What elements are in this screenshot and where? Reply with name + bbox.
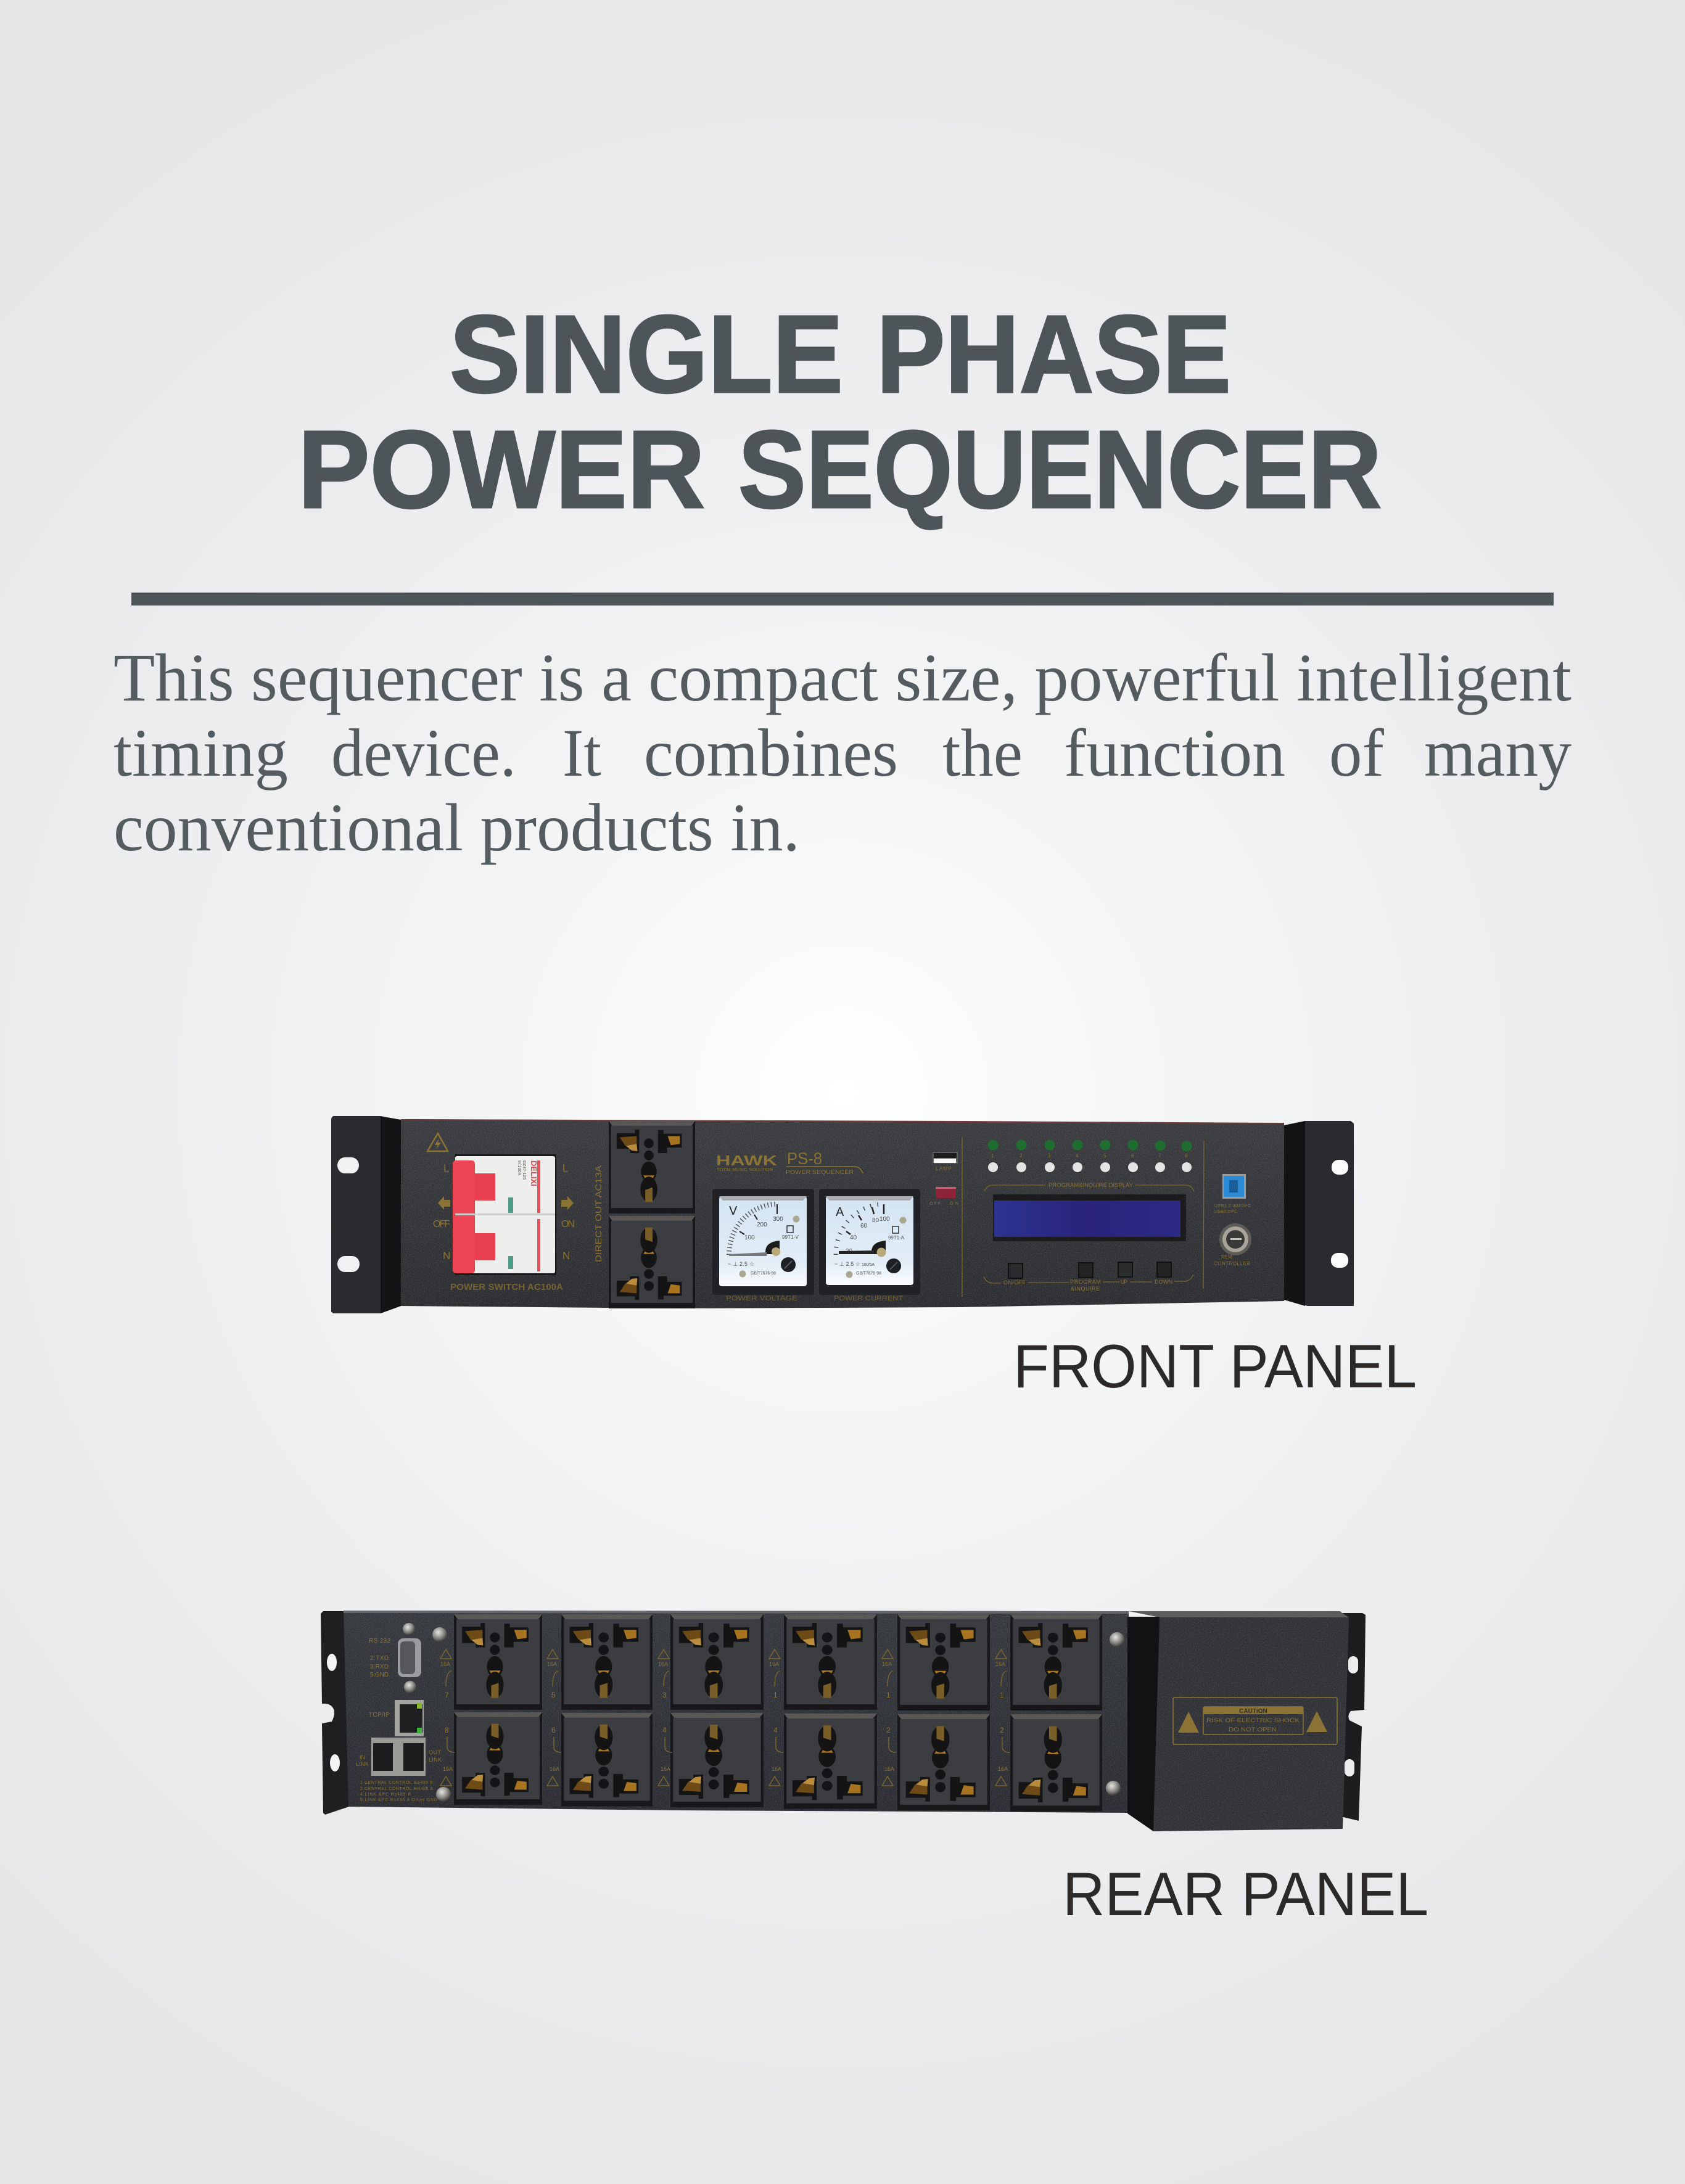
- rear socket 8: [561, 1713, 653, 1806]
- remote controller connector: REM: [1221, 1254, 1232, 1260]
- brand logo HAWK PS-8: PS-8: [787, 1149, 822, 1168]
- wiring notes: 2.CENTRAL CONTROL RS485 A: [360, 1787, 433, 1791]
- heading rule: [131, 593, 1554, 606]
- breaker labels: OFF: [433, 1219, 450, 1230]
- channel LEDs: 2: [1020, 1153, 1023, 1159]
- caution label: [1173, 1698, 1337, 1744]
- rear sockets top row: [454, 1614, 1102, 1710]
- rear right rack ear: [1326, 1613, 1366, 1821]
- circuit breaker: In:100A: [517, 1160, 521, 1175]
- channel LEDs: 5: [1103, 1153, 1106, 1159]
- socket strip labels: 8: [445, 1726, 449, 1734]
- button labels: [984, 1275, 1193, 1292]
- breaker labels: L: [443, 1162, 449, 1174]
- description paragraph: timing: [113, 715, 288, 790]
- ammeter: 20: [846, 1248, 853, 1255]
- socket strip labels: 1: [886, 1691, 891, 1699]
- wiring notes: 4.LINK &PC Rs485 B: [360, 1792, 411, 1797]
- ammeter: ~ ⊥ 2.5 ☆: [834, 1261, 860, 1267]
- socket strip labels: 16A: [882, 1661, 892, 1667]
- rear chassis body: [344, 1611, 1129, 1813]
- breaker labels: POWER SWITCH AC100A: [450, 1282, 563, 1292]
- wiring notes: 5.LINK &PC Rs485 A Other GND: [360, 1798, 437, 1802]
- socket strip labels: 16A: [550, 1766, 559, 1772]
- remote controller connector: [1214, 1223, 1251, 1266]
- socket strip labels: 16A: [547, 1661, 557, 1667]
- socket strip labels: 4: [773, 1726, 778, 1734]
- socket strip labels: 2: [1000, 1726, 1004, 1734]
- rear socket 7: [454, 1712, 542, 1805]
- socket strip labels: 16A: [443, 1766, 453, 1772]
- rear panel device: [321, 1611, 1366, 1831]
- remote controller connector: CONTROLLER: [1214, 1261, 1250, 1266]
- display label: [984, 1182, 1194, 1191]
- socket strip labels: 2: [886, 1726, 891, 1734]
- caution label: RISK OF ELECTRIC SHOCK: [1206, 1717, 1300, 1723]
- ammeter: 60: [860, 1223, 868, 1230]
- DB9 RS-232 connector: [369, 1623, 421, 1693]
- voltmeter: 100: [744, 1234, 755, 1241]
- ammeter: 100: [880, 1216, 890, 1223]
- rear top edge: [344, 1611, 1129, 1614]
- description paragraph: of: [1329, 715, 1384, 790]
- DB9 RS-232 connector: 2:TXD: [370, 1655, 389, 1662]
- button labels: ON/OFF: [1003, 1279, 1026, 1286]
- button labels: PROGRAM: [1070, 1279, 1101, 1285]
- link ports: LINK: [429, 1757, 442, 1763]
- socket strip labels: 3: [662, 1691, 667, 1699]
- ammeter: 40: [850, 1234, 857, 1241]
- breaker labels: L: [562, 1162, 568, 1174]
- caution label: DO NOT OPEN: [1229, 1726, 1277, 1733]
- circuit breaker: DZ47-125: [522, 1160, 526, 1180]
- circuit breaker: DELIXI: [529, 1160, 538, 1186]
- socket strip labels: 7: [445, 1691, 449, 1699]
- brand logo HAWK PS-8: POWER SEQUENCER: [786, 1169, 854, 1175]
- channel LEDs: 4: [1076, 1153, 1079, 1159]
- brand logo HAWK PS-8: [716, 1149, 863, 1175]
- link ports: IN: [360, 1754, 365, 1760]
- description paragraph: This sequencer is a compact size, powerful intelligent: [113, 640, 1572, 715]
- socket strip labels: 5: [551, 1691, 556, 1699]
- USB-B port: [1214, 1174, 1251, 1214]
- description paragraph: device.: [331, 715, 516, 790]
- rear socket 9: [670, 1713, 764, 1807]
- rear socket 11: [897, 1714, 990, 1810]
- socket strip labels: 16A: [772, 1766, 781, 1772]
- voltmeter: 99T1-V: [782, 1234, 799, 1240]
- title: [298, 292, 1382, 531]
- TCP/IP network port: [369, 1700, 424, 1736]
- meter captions: [726, 1295, 903, 1302]
- voltmeter: [712, 1189, 814, 1295]
- socket strip labels: 16A: [998, 1766, 1008, 1772]
- warning triangle: [427, 1133, 448, 1151]
- rear socket 6: [1010, 1614, 1102, 1710]
- brand logo HAWK PS-8: HAWK: [716, 1152, 778, 1168]
- front socket lower: [609, 1216, 695, 1308]
- ammeter: GB/T7676-98: [856, 1271, 881, 1276]
- terminal cover: [1127, 1611, 1349, 1831]
- USB lamp port: LAMP: [936, 1166, 952, 1172]
- title: POWER: [298, 408, 705, 531]
- DB9 RS-232 connector: RS-232: [369, 1638, 390, 1644]
- socket strip labels: 16A: [440, 1661, 450, 1667]
- DB9 RS-232 connector: 5:GND: [370, 1672, 389, 1678]
- socket strip labels: 16A: [995, 1661, 1005, 1667]
- front panel device: [331, 1116, 1354, 1313]
- ammeter: 80: [872, 1217, 880, 1224]
- socket strip labels: 6: [551, 1726, 556, 1734]
- wiring notes: 1.CENTRAL CONTROL RS485 B: [360, 1781, 433, 1785]
- voltmeter: GB/T7676-98: [751, 1271, 776, 1276]
- rear socket 10: [784, 1714, 877, 1809]
- ammeter: 100/5A: [862, 1263, 875, 1267]
- button labels: UP: [1121, 1279, 1127, 1285]
- USB-B port: USB2.0 WIFI/PC: [1214, 1204, 1251, 1209]
- description paragraph: the: [942, 715, 1023, 790]
- circuit breaker: [453, 1154, 556, 1275]
- socket strip labels: 16A: [658, 1661, 668, 1667]
- meter captions: POWER CURRENT: [834, 1295, 903, 1302]
- button labels: &INQUIRE: [1071, 1286, 1100, 1292]
- TCP/IP network port: TCP/IP: [369, 1712, 390, 1718]
- meter captions: POWER VOLTAGE: [726, 1295, 797, 1302]
- left rack ear: [331, 1116, 401, 1313]
- brand logo HAWK PS-8: TOTAL MUSIC SOLUTION: [717, 1168, 773, 1172]
- rear socket 3: [670, 1614, 764, 1710]
- title: SINGLE: [450, 292, 843, 416]
- link ports: LINK: [356, 1761, 369, 1767]
- caution label: CAUTION: [1239, 1708, 1267, 1715]
- control buttons: [1008, 1262, 1171, 1278]
- right rack ear: [1284, 1121, 1354, 1306]
- DB9 RS-232 connector: 3:RXD: [370, 1664, 389, 1670]
- title: PHASE: [876, 292, 1231, 416]
- voltmeter: ~ ⊥ 2.5 ☆: [728, 1261, 754, 1267]
- rear socket 12: [1010, 1714, 1102, 1812]
- description paragraph: conventional products in.: [113, 790, 800, 865]
- rear socket 5: [897, 1614, 990, 1710]
- socket strip labels: 1: [773, 1691, 778, 1699]
- socket strip labels: 16A: [661, 1766, 670, 1772]
- display label: PROGRAM&INQUIRE DISPLAY: [1048, 1182, 1133, 1188]
- USB-B port: USB3.0:PC: [1214, 1210, 1237, 1214]
- link ports: OUT: [429, 1749, 442, 1755]
- front chassis body: [401, 1119, 1284, 1308]
- voltmeter: 200: [757, 1221, 767, 1228]
- rear socket 2: [561, 1614, 653, 1710]
- channel LEDs: 1: [991, 1153, 994, 1159]
- ammeter: [819, 1189, 920, 1295]
- front socket upper: [609, 1121, 695, 1213]
- mounting screws: [432, 1627, 1124, 1802]
- front panel label: FRONT PANEL: [1013, 1332, 1417, 1400]
- socket strip labels: 16A: [769, 1661, 779, 1667]
- USB lamp port: [933, 1152, 958, 1172]
- link ports: [356, 1738, 442, 1776]
- description paragraph: function: [1064, 715, 1285, 790]
- socket strip labels: 4: [662, 1726, 667, 1734]
- breaker labels: ON: [561, 1219, 575, 1230]
- channel LEDs: 3: [1048, 1153, 1051, 1159]
- description paragraph: combines: [644, 715, 898, 790]
- ammeter: 99T1-A: [888, 1235, 905, 1241]
- rear sockets bottom row: [454, 1712, 1102, 1812]
- voltmeter: 300: [773, 1216, 783, 1223]
- gold dividers: [962, 1138, 1204, 1297]
- channel LEDs: [988, 1139, 1192, 1172]
- ammeter: A: [836, 1205, 844, 1219]
- rear panel label: REAR PANEL: [1063, 1860, 1428, 1928]
- wiring notes: [360, 1781, 437, 1802]
- power rocker switch: OFF: [929, 1202, 941, 1206]
- description paragraph: many: [1424, 715, 1572, 790]
- title: SEQUENCER: [738, 408, 1382, 531]
- breaker labels: N: [562, 1250, 570, 1262]
- socket strip labels: 1: [1000, 1691, 1004, 1699]
- rear socket 4: [784, 1614, 877, 1710]
- channel LEDs: 6: [1131, 1153, 1134, 1159]
- rear left rack ear: [321, 1611, 349, 1815]
- voltmeter: V: [729, 1204, 738, 1218]
- socket strip labels: 16A: [884, 1766, 894, 1772]
- LCD display: [993, 1194, 1186, 1241]
- rear socket 1: [454, 1614, 542, 1710]
- socket strip labels: [440, 1649, 1010, 1786]
- power rocker switch: [929, 1187, 958, 1206]
- power rocker switch: ON: [950, 1202, 958, 1206]
- top edge: [401, 1119, 1284, 1124]
- breaker labels: [433, 1162, 603, 1292]
- description paragraph: It: [562, 715, 601, 790]
- breaker labels: DIRECT OUT AC13A: [593, 1165, 603, 1262]
- button labels: DOWN: [1155, 1279, 1172, 1285]
- channel LEDs: 7: [1158, 1153, 1161, 1159]
- channel LEDs: 8: [1185, 1153, 1188, 1159]
- breaker labels: N: [443, 1250, 450, 1262]
